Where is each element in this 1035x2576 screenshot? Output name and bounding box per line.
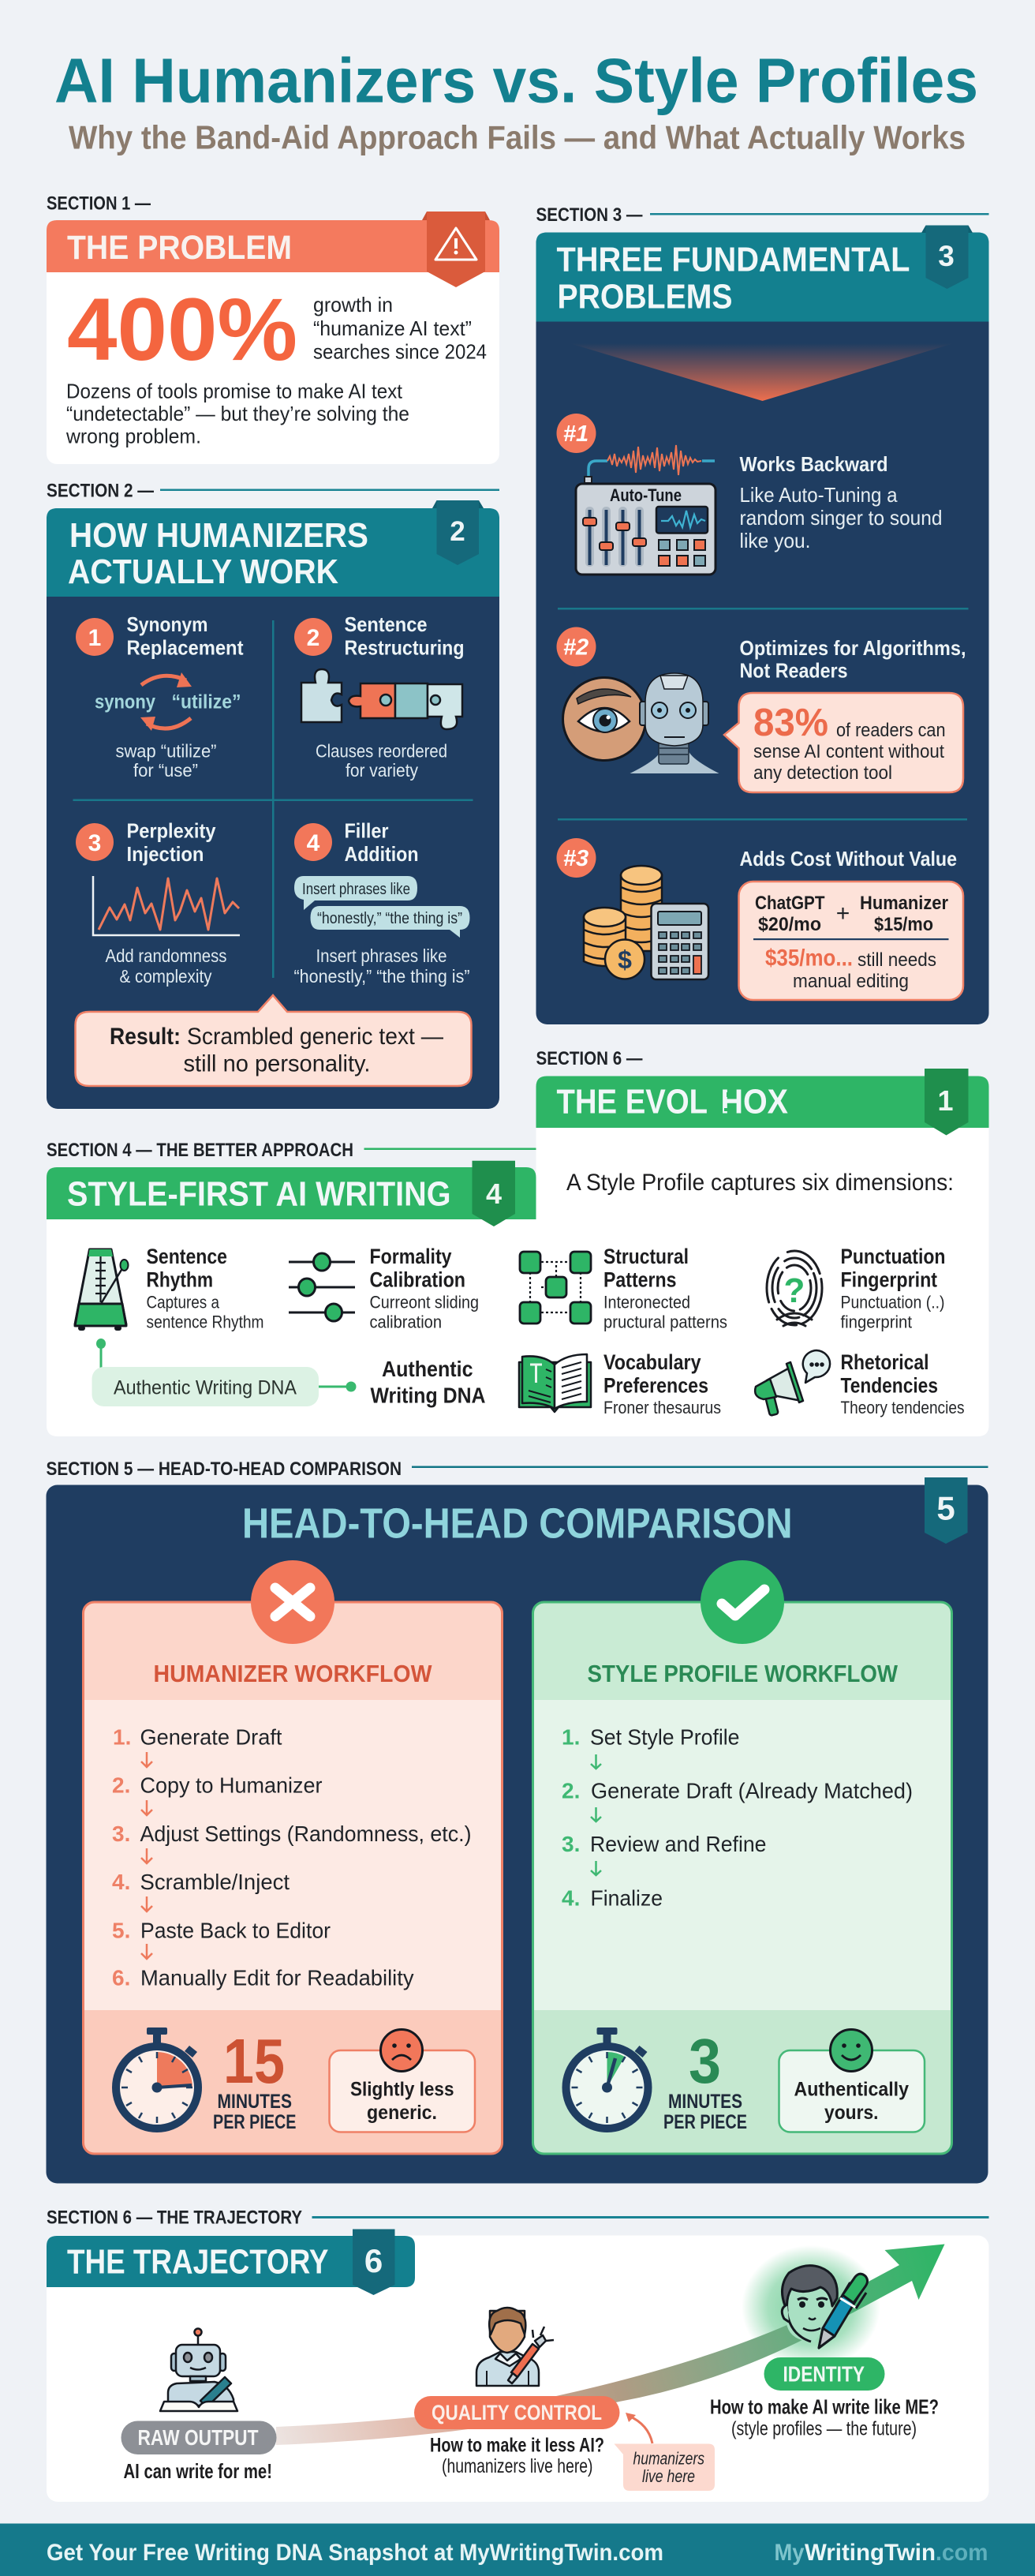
pill: quality control: QUALITY CONTROL: [432, 2401, 602, 2424]
call to action: Get Your Free Writing DNA Snapshot at MyWritingTwin.com: [47, 2540, 663, 2566]
workflow steps: 5.: [112, 1918, 130, 1943]
dimension: punctuation fingerprint: Fingerprint: [841, 1267, 937, 1291]
stat: 15 minutes per piece: [213, 2026, 297, 2133]
dimension: structural patterns: pructural patterns: [603, 1312, 727, 1332]
dimension: vocabulary preferences: [519, 1350, 721, 1417]
callout: humanizers live here: [614, 2413, 715, 2491]
workflow steps: Generate Draft: [140, 1725, 282, 1749]
badge: warning: [422, 212, 490, 287]
callout: 83%: 83%: [753, 702, 828, 744]
problem 2: optimizes for algorithms: [557, 627, 966, 792]
problem description: Dozens of tools promise to make AI text: [66, 379, 403, 402]
heading: PROBLEMS: [557, 278, 732, 316]
problem 3: adds cost without value: Adds Cost Without Value: [740, 847, 957, 871]
outcome: authentically yours: yours.: [824, 2102, 879, 2124]
dimension: formality calibration: Calibration: [369, 1267, 465, 1291]
dimension: sentence rhythm: Captures a: [147, 1293, 220, 1312]
brand logo: .com: [936, 2540, 988, 2566]
workflow steps: Review and Refine: [590, 1832, 767, 1856]
workflow steps: 1.: [562, 1725, 580, 1749]
panel: style-first AI writing: [47, 1069, 989, 1436]
pill: authentic writing DNA: Authentic Writing DNA: [114, 1376, 297, 1398]
stat: 3 minutes per piece: PER PIECE: [663, 2111, 747, 2133]
workflow title: HUMANIZER WORKFLOW: [153, 1660, 432, 1687]
badge: 6: [353, 2229, 394, 2295]
dimension: punctuation fingerprint: Punctuation: [841, 1245, 945, 1268]
section 6 label: [47, 2207, 989, 2229]
icon: swap arrows: [95, 672, 241, 731]
method 3: perplexity injection: 3: [88, 830, 101, 856]
icon: coins and calculator: [584, 866, 708, 979]
method 2: sentence restructuring: Clauses reordered: [316, 740, 447, 761]
method 4: filler addition: Filler: [344, 819, 388, 843]
dimension: structural patterns: Structural: [603, 1245, 689, 1268]
workflow steps: 6.: [112, 1965, 130, 1990]
stage: quality control: How to make it less AI?: [430, 2434, 604, 2456]
statistic description: searches since 2024: [313, 339, 487, 363]
problem 2: optimizes for algorithms: Not Readers: [740, 658, 847, 682]
panel: how humanizers actually work: [47, 500, 499, 1109]
stage: identity: How to make AI write like ME?: [710, 2394, 939, 2418]
stat: 3 minutes per piece: 3: [689, 2026, 721, 2096]
method 3: perplexity injection: [76, 819, 240, 987]
stage: raw output: AI can write for me!: [123, 2459, 272, 2483]
method 1: synonym replacement: [76, 612, 244, 781]
outcome: slightly less generic: Slightly less: [350, 2079, 454, 2101]
dimension: rhetorical tendencies: Rhetorical: [841, 1350, 929, 1374]
card: style profile workflow: [533, 1560, 951, 2154]
stat: 3 minutes per piece: MINUTES: [668, 2091, 742, 2113]
badge: 5: 5: [936, 1490, 955, 1526]
dimension: vocabulary preferences: Froner thesaurus: [603, 1398, 721, 1417]
dimension: sentence rhythm: sentence Rhythm: [147, 1312, 263, 1332]
dimension: structural patterns: Interonected: [603, 1293, 690, 1312]
icon: x mark: [251, 1560, 334, 1644]
icon: check mark: [701, 1560, 784, 1644]
method 4: filler addition: “honestly,” “the thing is”: [293, 966, 470, 987]
workflow steps: Adjust Settings (Randomness, etc.): [140, 1822, 472, 1846]
icon: person with red pen: [476, 2308, 554, 2386]
icon: auto-tune device: [576, 445, 716, 575]
workflow steps: Copy to Humanizer: [140, 1773, 322, 1798]
brand logo: WritingTwin: [805, 2540, 936, 2566]
workflow steps: Generate Draft (Already Matched): [591, 1779, 913, 1803]
stat: 3 minutes per piece: [663, 2026, 747, 2133]
workflow steps: 4.: [112, 1870, 130, 1894]
icon: face with pen: [782, 2266, 868, 2348]
subtitle: Why the Band-Aid Approach Fails — and What Actually Works: [69, 118, 966, 156]
heading: HEAD-TO-HEAD COMPARISON: [242, 1500, 792, 1547]
icon: swap arrows: synony: [95, 691, 155, 713]
method 2: sentence restructuring: Restructuring: [344, 636, 464, 660]
footer banner: [0, 2524, 1035, 2576]
workflow steps: 2.: [562, 1779, 580, 1803]
brand logo: [775, 2540, 988, 2566]
callout: cost breakdown: Humanizer: [860, 893, 948, 914]
outcome: authentically yours: Authentically: [794, 2079, 909, 2101]
section 1 label: SECTION 1 —: [47, 193, 151, 215]
brand logo: My: [775, 2540, 805, 2566]
icon: megaphone and speech bubble: [755, 1350, 830, 1416]
problem 1: works backward: #1: [563, 421, 588, 447]
chart: noisy line: [93, 876, 240, 935]
icon: fingerprint: [767, 1251, 822, 1326]
dimension: rhetorical tendencies: Tendencies: [841, 1373, 938, 1397]
callout: result: Scrambled generic text —: [187, 1024, 443, 1050]
method 3: perplexity injection: & complexity: [120, 966, 212, 987]
dimension: punctuation fingerprint: Punctuation (..): [841, 1293, 945, 1312]
icon: stopwatch 15 minutes: [116, 2027, 198, 2129]
outcome: authentically yours: [779, 2030, 925, 2132]
stage: identity: (style profiles — the future): [731, 2418, 917, 2440]
panel: three fundamental problems: [536, 226, 989, 1024]
header: the evol box: THE EVOL: [557, 1083, 708, 1121]
section 5 label: SECTION 5 — HEAD-TO-HEAD COMPARISON: [46, 1458, 402, 1480]
funnel glow: [570, 343, 954, 401]
stage: identity: [710, 2266, 939, 2440]
method 3: perplexity injection: Injection: [126, 842, 204, 866]
problem 1: works backward: Like Auto-Tuning a: [740, 483, 898, 507]
workflow steps: 4.: [562, 1886, 580, 1910]
method 1: synonym replacement: Replacement: [126, 636, 244, 660]
callout: cost breakdown: manual editing: [793, 971, 909, 992]
icon: sliders: [289, 1253, 355, 1321]
heading: HOW HUMANIZERS: [69, 516, 368, 555]
dimension: formality calibration: Formality: [369, 1245, 451, 1268]
stat: 15 minutes per piece: 15: [223, 2026, 285, 2096]
method 4: filler addition: 4: [307, 830, 320, 856]
workflow steps: Finalize: [590, 1886, 663, 1910]
stage: quality control: [414, 2308, 620, 2477]
badge: 2: 2: [450, 516, 465, 547]
speech bubbles: “honestly,” “the thing is”: [317, 910, 462, 927]
badge: 3: [921, 226, 973, 289]
outcome: slightly less generic: generic.: [367, 2102, 437, 2124]
dimension: structural patterns: Patterns: [603, 1267, 677, 1291]
glow behind identity face: [742, 2245, 880, 2368]
dimension: sentence rhythm: [75, 1245, 263, 1332]
workflow steps: [112, 1725, 472, 1990]
icon: connected nodes: [520, 1252, 591, 1324]
intro sentence: A Style Profile captures six dimensions:: [566, 1170, 954, 1196]
icon: swap arrows: “utilize”: [172, 691, 241, 713]
section 2 label: SECTION 2 —: [47, 480, 154, 502]
method 2: sentence restructuring: Sentence: [344, 612, 428, 636]
connector to writing DNA: [96, 1339, 357, 1392]
callout: cost breakdown: $20/mo: [758, 914, 821, 935]
stage: raw output: [121, 2328, 276, 2483]
heading: the problem: THE PROBLEM: [67, 229, 292, 267]
pill: authentic writing DNA: [92, 1367, 319, 1406]
problem description: [65, 379, 409, 448]
icon: stopwatch 3 minutes: [566, 2027, 648, 2129]
speech bubbles: [294, 876, 470, 938]
header: the evol box: HOX: [721, 1083, 788, 1121]
callout: humanizers live here: live here: [642, 2466, 695, 2486]
workflow steps: Set Style Profile: [590, 1725, 740, 1749]
problem 1: works backward: [557, 414, 942, 575]
dimension: vocabulary preferences: Vocabulary: [603, 1350, 701, 1374]
callout: cost breakdown: still needs: [858, 949, 936, 971]
title: AI Humanizers vs. Style Profiles: [54, 46, 978, 115]
problem 1: works backward: like you.: [740, 529, 811, 552]
heading: ACTUALLY WORK: [68, 552, 338, 591]
icon: metronome: [75, 1249, 128, 1331]
stat: 15 minutes per piece: PER PIECE: [213, 2111, 297, 2133]
workflow steps: Manually Edit for Readability: [140, 1965, 413, 1990]
dimension: vocabulary preferences: Preferences: [603, 1373, 708, 1397]
badge: 3: 3: [938, 240, 955, 272]
callout: humanizers live here: humanizers: [633, 2448, 704, 2469]
panel: the problem: [47, 212, 499, 464]
badge: 1: [925, 1069, 969, 1135]
workflow steps: 2.: [112, 1773, 130, 1798]
section 4 label: SECTION 4 — THE BETTER APPROACH: [47, 1140, 353, 1161]
icon: puzzle pieces: [301, 669, 462, 729]
section 6 label: SECTION 6 — THE TRAJECTORY: [47, 2207, 302, 2229]
callout: cost breakdown: $15/mo: [874, 914, 933, 935]
section 6 label (upper): SECTION 6 —: [536, 1048, 642, 1069]
heading: the trajectory: THE TRAJECTORY: [67, 2243, 328, 2281]
problem 1: works backward: random singer to sound: [740, 506, 942, 530]
callout: cost breakdown: $35/mo...: [765, 945, 853, 971]
callout: 83%: any detection tool: [753, 762, 892, 784]
heading: style-first: STYLE-FIRST AI WRITING: [67, 1174, 451, 1214]
badge: 5: [925, 1477, 967, 1544]
arrow: trajectory band: [276, 2245, 945, 2445]
workflow steps: 3.: [112, 1822, 130, 1846]
dimension: sentence rhythm: Rhythm: [147, 1267, 213, 1291]
heading: [68, 516, 368, 591]
callout: cost breakdown: ChatGPT: [755, 893, 825, 914]
dimension: formality calibration: Curreont sliding: [369, 1293, 479, 1312]
workflow steps: 1.: [113, 1725, 131, 1749]
icon: robot writing: [160, 2328, 237, 2411]
heading: THREE FUNDAMENTAL: [557, 240, 910, 279]
badge: 4: [472, 1161, 515, 1226]
dimension: sentence rhythm: Sentence: [147, 1245, 227, 1268]
problem description: wrong problem.: [65, 425, 201, 448]
dimension: rhetorical tendencies: [755, 1350, 964, 1417]
label: authentic writing DNA: Authentic: [382, 1357, 473, 1381]
dimension: structural patterns: [520, 1245, 727, 1332]
method 1: synonym replacement: Synonym: [126, 612, 208, 636]
badge: 2: [432, 500, 484, 565]
icon: open book: [519, 1354, 591, 1412]
card: humanizer workflow: [84, 1560, 502, 2154]
problem 1: works backward: Works Backward: [740, 452, 888, 476]
badge: 4: 4: [486, 1178, 502, 1210]
stage: quality control: (humanizers live here): [442, 2455, 593, 2477]
badge: 1: 1: [937, 1084, 954, 1117]
problem 3: adds cost without value: [557, 838, 963, 1000]
pill: quality control: [414, 2396, 620, 2429]
method 3: perplexity injection: Add randomness: [106, 945, 227, 966]
pill: identity: IDENTITY: [783, 2361, 865, 2387]
icon: fingerprint: ?: [784, 1271, 805, 1310]
header tab: [47, 2236, 415, 2287]
method 2: sentence restructuring: [294, 612, 464, 781]
method 3: perplexity injection: Perplexity: [126, 819, 216, 843]
workflow title: STYLE PROFILE WORKFLOW: [587, 1660, 899, 1687]
workflow steps: 3.: [562, 1832, 580, 1856]
badge: 6: 6: [364, 2242, 383, 2279]
method 4: filler addition: Addition: [344, 842, 418, 866]
label: authentic writing DNA: Writing DNA: [371, 1383, 486, 1408]
method 1: synonym replacement: for “use”: [133, 760, 198, 781]
statistic: 400%: 400%: [67, 280, 297, 379]
dimension: formality calibration: calibration: [369, 1312, 442, 1332]
dimension: punctuation fingerprint: fingerprint: [841, 1312, 912, 1332]
header: the evol box: [536, 1069, 989, 1135]
problem description: “undetectable” — but they’re solving the: [66, 402, 409, 425]
workflow steps: [562, 1725, 913, 1910]
section 3 label: SECTION 3 —: [536, 204, 642, 226]
pill: identity: [764, 2357, 885, 2391]
callout: result: still no personality.: [183, 1051, 371, 1076]
workflow steps: Scramble/Inject: [140, 1870, 290, 1894]
dimension: formality calibration: [289, 1245, 479, 1332]
workflow steps: Paste Back to Editor: [140, 1918, 331, 1943]
icon: auto-tune device: Auto-Tune: [610, 485, 682, 505]
callout: cost breakdown: +: [836, 900, 850, 927]
stat: 15 minutes per piece: MINUTES: [218, 2091, 292, 2113]
pill: raw output: RAW OUTPUT: [137, 2425, 259, 2450]
problem 3: adds cost without value: #3: [563, 846, 588, 871]
statistic description: “humanize AI text”: [313, 316, 472, 340]
method 4: filler addition: [293, 819, 470, 987]
panel: the trajectory: [47, 2229, 989, 2502]
dimension: punctuation fingerprint: [767, 1245, 945, 1332]
statistic description: [313, 293, 487, 363]
problem 2: optimizes for algorithms: Optimizes for Algorithms,: [740, 636, 966, 660]
pill: raw output: [121, 2421, 276, 2454]
method 1: synonym replacement: swap “utilize”: [115, 740, 216, 761]
callout: 83%: sense AI content without: [753, 741, 944, 762]
label: authentic writing DNA: [371, 1357, 486, 1408]
method 2: sentence restructuring: 2: [307, 625, 319, 651]
dimension: rhetorical tendencies: Theory tendencies: [841, 1398, 964, 1417]
callout: 83%: of readers can: [836, 720, 945, 741]
method 1: synonym replacement: 1: [88, 625, 101, 651]
method 4: filler addition: Insert phrases like: [316, 945, 447, 966]
icon: coins and calculator: $: [618, 945, 632, 974]
callout: cost breakdown: [738, 882, 963, 1000]
callout: result: [76, 995, 472, 1086]
speech bubbles: Insert phrases like: [302, 881, 410, 898]
callout: result: Result:: [110, 1024, 181, 1050]
panel: head-to-head comparison: [46, 1477, 988, 2183]
outcome: slightly less generic: [330, 2030, 475, 2132]
problem 2: optimizes for algorithms: #2: [563, 635, 588, 660]
icon: eye and robot: [563, 673, 719, 773]
statistic description: growth in: [313, 293, 393, 316]
callout: 83%: [724, 693, 963, 792]
method 2: sentence restructuring: for variety: [346, 760, 418, 781]
heading: [557, 240, 910, 316]
